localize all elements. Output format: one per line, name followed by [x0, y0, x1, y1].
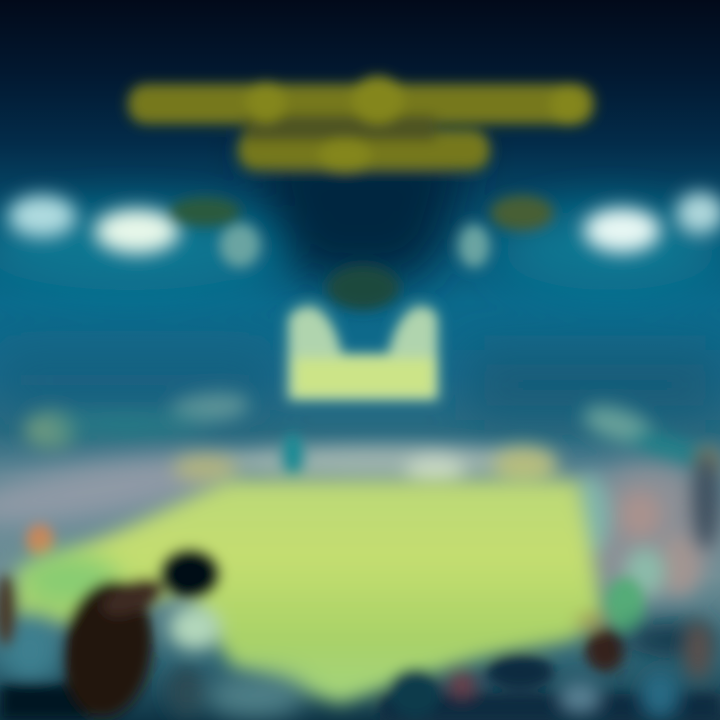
title (illegible in the reference: rendered as blurred yellow bars): [128, 76, 594, 171]
central scoreboard: [288, 266, 438, 400]
upper stand lights: left: [8, 195, 260, 267]
crowd mid band: [24, 390, 718, 476]
sky shadow and stand haze: [0, 140, 720, 420]
lower stands: [0, 433, 720, 596]
bottom crowd: [0, 574, 720, 720]
upper stand lights: right: [458, 192, 720, 268]
spectator silhouette: [55, 550, 219, 720]
pitch: [12, 480, 645, 704]
